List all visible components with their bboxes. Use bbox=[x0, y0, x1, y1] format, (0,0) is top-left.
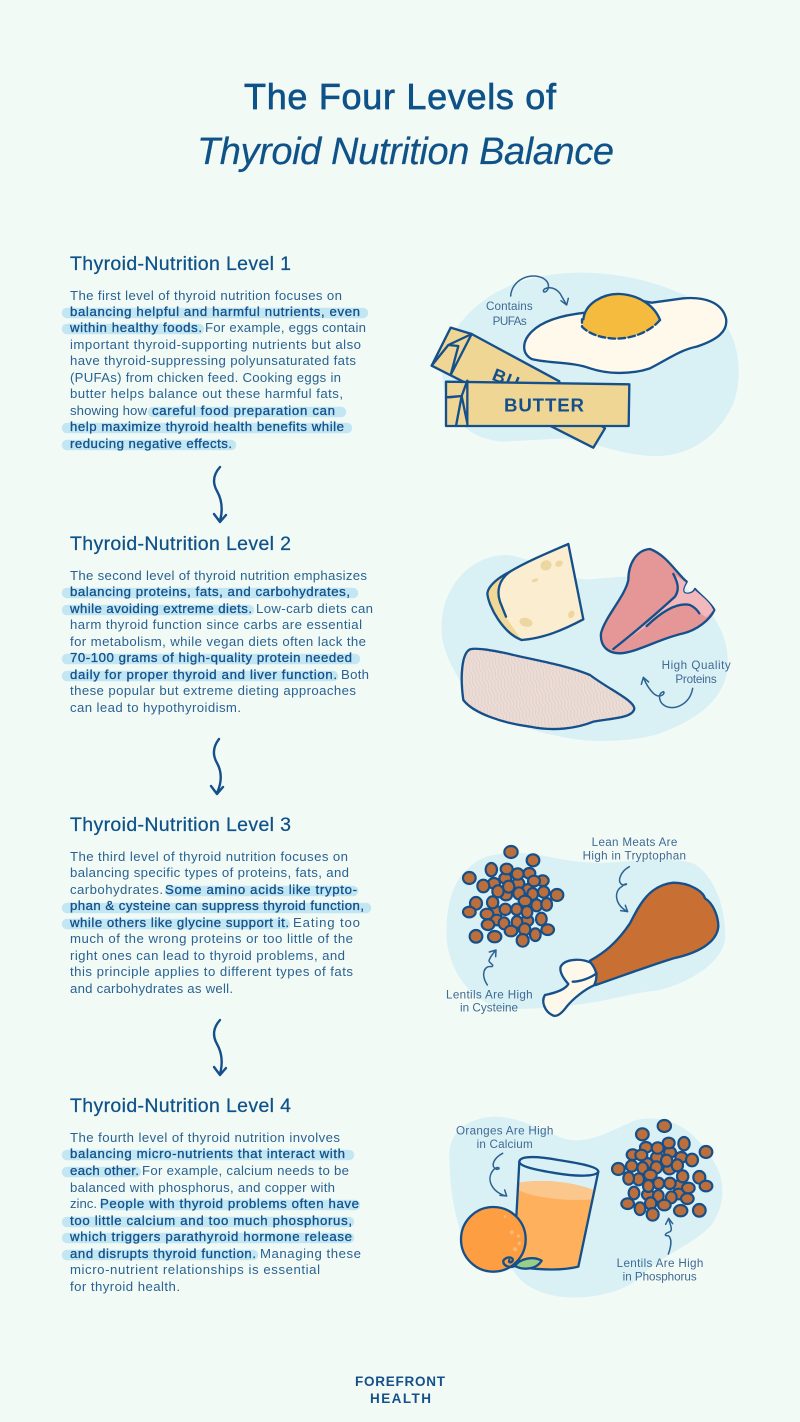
body text: level 1: within healthy foods. bbox=[69, 320, 202, 335]
egg bbox=[524, 294, 726, 373]
orange bbox=[461, 1207, 542, 1272]
body text: level 3: this principle applies to different types of fats bbox=[70, 964, 353, 979]
front butter: BUTTER bbox=[504, 395, 585, 416]
body text: level 2: these popular but extreme dieting approaches bbox=[70, 683, 356, 698]
highlights: level 2 bbox=[67, 593, 355, 676]
label: lentils phosphorus bbox=[617, 1257, 703, 1283]
body text: level 4: which triggers parathyroid hormone release bbox=[69, 1229, 352, 1244]
body text: level 2: harm thyroid function since carbs are essential bbox=[70, 617, 362, 632]
body text: level 4: micro-nutrient relationships is essential bbox=[70, 1262, 320, 1277]
body text: level 1: have thyroid-suppressing polyunsaturated fats bbox=[70, 353, 356, 368]
body text: level 2: for metabolism, while vegan diets often lack the bbox=[70, 634, 366, 649]
arrow: level 3 to level 4 bbox=[214, 1020, 226, 1075]
body text: level 4: balanced with phosphorus, and copper with bbox=[70, 1180, 335, 1195]
body text: level 1: reducing negative effects. bbox=[70, 436, 232, 451]
body text: level 2: can lead to hypothyroidism. bbox=[70, 700, 241, 715]
label: lean meats: High in Tryptophan bbox=[583, 849, 686, 862]
body text: level 1: careful food preparation can bbox=[152, 403, 335, 418]
label: lentils phosphorus: Lentils Are High bbox=[617, 1257, 703, 1270]
body text: level 1: important thyroid-supporting nutrients but also bbox=[70, 337, 361, 352]
body text: level 4: balancing micro-nutrients that interact with bbox=[70, 1146, 345, 1161]
drumstick meat bbox=[590, 883, 718, 985]
arrow: level 2 to level 3 bbox=[211, 739, 223, 794]
body text: level 3 bbox=[69, 849, 364, 996]
cheese bbox=[487, 544, 583, 640]
label: lentils phosphorus: in Phosphorus bbox=[623, 1270, 697, 1283]
arrow: lentils callout bbox=[484, 950, 496, 985]
body text: level 4: too little calcium and too much phosphorus, bbox=[70, 1213, 352, 1228]
body text: level 1: balancing helpful and harmful nutrients, even bbox=[70, 304, 360, 319]
body text: level 4: each other. bbox=[70, 1163, 139, 1178]
highlights: level 4 bbox=[67, 1155, 355, 1255]
body text: level 1: help maximize thyroid health benefits while bbox=[70, 419, 344, 434]
title bbox=[197, 76, 614, 173]
label: lean meats: Lean Meats Are bbox=[592, 836, 677, 849]
body text: level 2: 70-100 grams of high-quality protein needed bbox=[70, 650, 352, 665]
label: high quality proteins: Proteins bbox=[675, 673, 717, 686]
steak bbox=[601, 549, 714, 653]
body text: level 3: Eating too bbox=[293, 915, 360, 930]
body text: level 2 bbox=[69, 568, 373, 715]
panel: level 2 text bbox=[67, 533, 373, 715]
front butter bbox=[446, 381, 629, 426]
background blob bbox=[449, 1117, 722, 1298]
glass of juice bbox=[515, 1157, 598, 1269]
arrow: lentils phosphorus callout bbox=[665, 1218, 673, 1254]
arrow: oranges callout bbox=[490, 1153, 507, 1196]
lentils bbox=[463, 846, 563, 947]
body text: level 1: showing how bbox=[70, 403, 147, 418]
body text: level 3: right ones can lead to thyroid problems, and bbox=[70, 948, 345, 963]
body text: level 4: For example, calcium needs to be bbox=[142, 1163, 349, 1178]
label: contains PUFAs: Contains bbox=[486, 300, 533, 313]
illustration: lentils and drumstick bbox=[446, 836, 725, 1016]
title: Thyroid Nutrition Balance bbox=[197, 131, 614, 173]
label: high quality proteins bbox=[662, 659, 731, 686]
back butter bbox=[432, 328, 605, 448]
label: lean meats bbox=[583, 836, 686, 862]
background blob bbox=[441, 555, 728, 741]
label: oranges bbox=[456, 1125, 553, 1151]
heading: level 3: Thyroid-Nutrition Level 3 bbox=[70, 814, 291, 836]
arrow: level 1 to level 2 bbox=[214, 467, 226, 522]
body text: level 2: while avoiding extreme diets. bbox=[69, 601, 252, 616]
heading: level 4: Thyroid-Nutrition Level 4 bbox=[70, 1095, 291, 1117]
panel: level 3 text bbox=[67, 814, 366, 996]
body text: level 2: balancing proteins, fats, and carbohydrates, bbox=[70, 584, 350, 599]
illustration: proteins bbox=[441, 544, 731, 741]
arrow: proteins callout bbox=[641, 677, 693, 708]
body text: level 3: Some amino acids like trypto- bbox=[165, 882, 357, 897]
arrow: lean meats callout bbox=[617, 867, 629, 912]
body text: level 3: The third level of thyroid nutrition focuses on bbox=[70, 849, 348, 864]
body text: level 3: balancing specific types of proteins, fats, and bbox=[70, 865, 349, 880]
title: The Four Levels of bbox=[244, 76, 557, 117]
lentils bbox=[612, 1120, 712, 1221]
body text: level 3: phan & cysteine can suppress thyroid function, bbox=[70, 898, 364, 913]
body text: level 2: The second level of thyroid nutrition emphasizes bbox=[70, 568, 367, 583]
label: lentils cysteine: Lentils Are High bbox=[446, 988, 533, 1001]
label: oranges: Oranges Are High bbox=[456, 1125, 553, 1138]
logo: Forefront Health: FOREFRONT bbox=[355, 1374, 446, 1389]
body text: level 3: much of the wrong proteins or too little of the bbox=[70, 931, 353, 946]
back butter: BU bbox=[490, 364, 523, 394]
label: lentils cysteine bbox=[446, 988, 533, 1015]
background blob bbox=[442, 273, 739, 456]
body text: level 4: People with thyroid problems often have bbox=[100, 1196, 359, 1211]
body text: level 3: carbohydrates. bbox=[70, 882, 163, 897]
body text: level 1: butter helps balance out these harmful fats, bbox=[70, 386, 343, 401]
logo: Forefront Health: HEALTH bbox=[370, 1391, 431, 1406]
panel: level 1 text bbox=[67, 253, 366, 451]
label: contains PUFAs: PUFAs bbox=[493, 315, 527, 328]
body text: level 2: daily for proper thyroid and liver function. bbox=[70, 667, 337, 682]
heading: level 2: Thyroid-Nutrition Level 2 bbox=[70, 533, 291, 555]
body text: level 4: for thyroid health. bbox=[70, 1279, 180, 1294]
label: high quality proteins: High Quality bbox=[662, 659, 731, 672]
body text: level 1: The first level of thyroid nutrition focuses on bbox=[70, 288, 342, 303]
label: contains PUFAs bbox=[486, 300, 533, 328]
body text: level 1: (PUFAs) from chicken feed. Cooking eggs in bbox=[70, 370, 341, 385]
body text: level 3: and carbohydrates as well. bbox=[70, 981, 233, 996]
body text: level 2: Low-carb diets can bbox=[256, 601, 373, 616]
body text: level 4 bbox=[69, 1130, 361, 1294]
illustration: egg and butter bbox=[432, 273, 739, 456]
label: oranges: in Calcium bbox=[477, 1138, 533, 1151]
logo: Forefront Health bbox=[355, 1374, 446, 1406]
body text: level 2: Both bbox=[341, 667, 369, 682]
body text: level 1 bbox=[69, 288, 366, 451]
panel: level 4 text bbox=[67, 1095, 361, 1294]
label: lentils cysteine: in Cysteine bbox=[460, 1002, 518, 1015]
highlights: level 3 bbox=[67, 891, 366, 924]
body text: level 4: and disrupts thyroid function. bbox=[70, 1246, 256, 1261]
body text: level 4: Managing these bbox=[260, 1246, 361, 1261]
background blob bbox=[446, 853, 725, 1009]
heading: level 1: Thyroid-Nutrition Level 1 bbox=[70, 253, 291, 275]
body text: level 4: zinc. bbox=[70, 1196, 97, 1211]
drumstick bone bbox=[543, 960, 597, 1016]
fish fillet bbox=[462, 649, 634, 729]
body text: level 3: while others like glycine support it. bbox=[69, 915, 289, 930]
body text: level 4: The fourth level of thyroid nutrition involves bbox=[70, 1130, 340, 1145]
body text: level 1: For example, eggs contain bbox=[205, 320, 366, 335]
arrow: PUFAs callout bbox=[511, 276, 568, 305]
highlights: level 1 bbox=[67, 313, 363, 445]
illustration: orange juice and lentils bbox=[449, 1117, 722, 1298]
